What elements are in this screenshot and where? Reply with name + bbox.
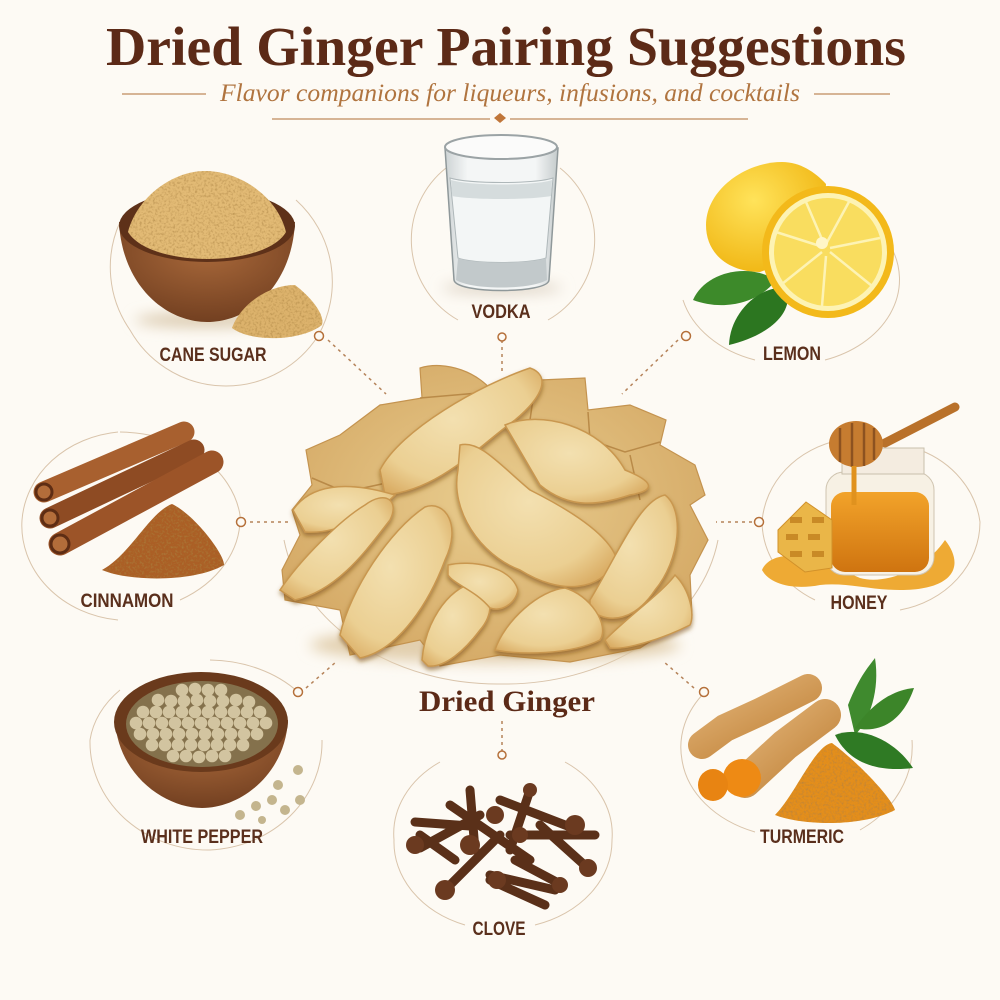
label: vodka: VODKA	[472, 302, 531, 323]
icon: lemon	[693, 162, 894, 345]
panel: white pepper	[90, 660, 322, 850]
label: cinnamon: CINNAMON	[80, 591, 174, 612]
icon: bowl of cane sugar	[119, 171, 322, 338]
label: cane sugar: CANE SUGAR	[160, 345, 267, 366]
icon: honey jar and dipper	[762, 407, 955, 590]
panel: lemon	[682, 162, 899, 365]
icon: glass of vodka	[442, 135, 562, 294]
panel: vodka	[411, 135, 595, 341]
icon: dried ginger pile	[280, 366, 708, 666]
panel: honey	[754, 407, 980, 614]
slice edges at the back	[312, 385, 660, 650]
label: dried ginger: Dried Ginger	[419, 685, 595, 718]
backing of the pile	[282, 366, 708, 666]
label: clove: CLOVE	[472, 919, 526, 940]
icon: cinnamon sticks and powder	[36, 432, 224, 578]
subtitle: Flavor companions for liqueurs, infusions, and cocktails	[219, 80, 800, 107]
panel: dried ginger centre	[280, 366, 718, 718]
label: honey: HONEY	[830, 593, 888, 614]
panel: cinnamon	[22, 432, 246, 620]
panel: cane sugar	[110, 171, 332, 386]
icon: turmeric	[698, 658, 914, 823]
header ornament	[122, 94, 890, 123]
panel: turmeric	[681, 658, 914, 848]
label: white pepper: WHITE PEPPER	[141, 827, 263, 848]
title: Dried Ginger Pairing Suggestions	[106, 16, 906, 77]
panel: clove	[394, 751, 612, 940]
label: lemon: LEMON	[763, 344, 821, 365]
icon: bowl of white pepper	[114, 672, 305, 824]
icon: cloves	[406, 783, 597, 905]
label: turmeric: TURMERIC	[760, 827, 844, 848]
connector lines	[250, 340, 752, 752]
